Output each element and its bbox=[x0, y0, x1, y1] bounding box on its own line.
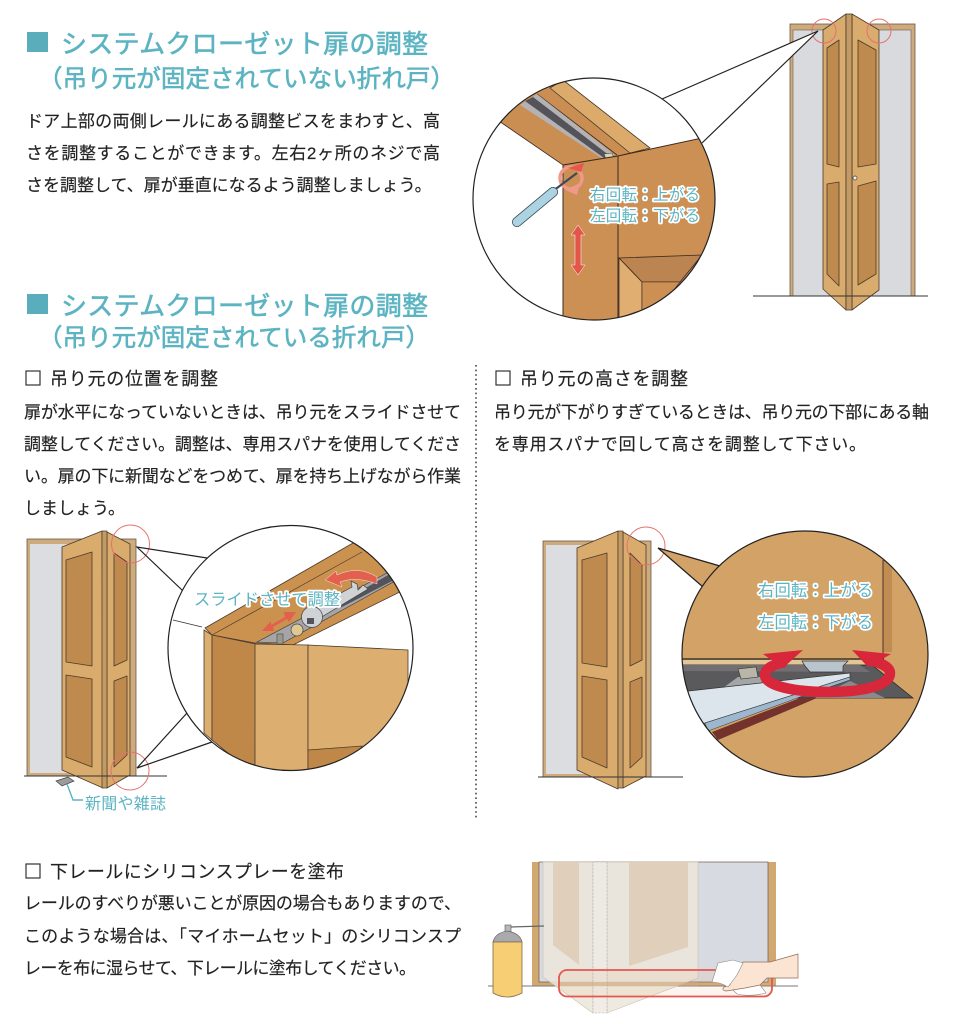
label: rotation direction, right: 左回転：下がる bbox=[758, 614, 873, 632]
illustration: closet frame with faded doors bbox=[488, 862, 798, 1013]
label: rotation direction, top bbox=[590, 186, 700, 225]
heading: section 1 bbox=[27, 29, 455, 93]
plate: spanner blade bbox=[688, 672, 850, 724]
arrow: spanner turning bbox=[325, 570, 377, 587]
text block: adjust hanger height: 吊り元の高さを調整 bbox=[520, 369, 688, 389]
arrow: rotation ring bbox=[763, 650, 891, 692]
dotted divider bbox=[475, 365, 477, 820]
heading: section 1: （吊り元が固定されていない折れ戸） bbox=[38, 65, 455, 93]
label: newspapers or magazines: 新聞や雑誌 bbox=[85, 795, 166, 813]
callout: magnified rail with screwdriver bbox=[473, 31, 818, 330]
heading: section 2 bbox=[27, 291, 430, 352]
heading: section 2: （吊り元が固定されている折れ戸） bbox=[38, 324, 430, 352]
callout: magnified hanger with wrench bbox=[137, 526, 420, 790]
text block: adjust hanger position bbox=[24, 369, 461, 518]
text block: silicone spray bbox=[24, 862, 461, 978]
label: rotation direction, right: 右回転：上がる bbox=[758, 582, 873, 600]
icon: spray can bbox=[493, 925, 544, 997]
heading: section 2: システムクローゼット扉の調整 bbox=[61, 291, 428, 321]
illustration: folding door, top right bbox=[753, 14, 928, 310]
text block: adjust hanger position: しましょう。 bbox=[24, 499, 125, 518]
text block: adjust hanger height: を専用スパナで回して高さを調整して下さい。 bbox=[494, 435, 866, 454]
illustration: folding door, middle right bbox=[538, 527, 683, 789]
heading: section 1: システムクローゼット扉の調整 bbox=[61, 29, 428, 59]
text block: adjust hanger height: 吊り元が下がりすぎているときは、吊り元の下部にある軸 bbox=[494, 403, 929, 422]
text block: adjust hanger position: 扉が水平になっていないときは、吊り元をスライドさせて bbox=[24, 403, 461, 422]
icon: hand wiping with cloth bbox=[712, 954, 798, 995]
text block: section 1 description bbox=[26, 112, 440, 195]
text block: silicone spray: レーを布に湿らせて、下レールに塗布してください。 bbox=[24, 959, 416, 978]
arrow: up and down bbox=[571, 225, 585, 275]
callout: magnified lower pivot bbox=[658, 531, 928, 777]
text block: adjust hanger height bbox=[494, 369, 929, 454]
text block: section 1 description: ドア上部の両側レールにある調整ビスをまわすと、高 bbox=[26, 112, 440, 131]
text block: silicone spray: このような場合は、「マイホームセット」のシリコンスプ bbox=[24, 927, 461, 946]
label: slide to adjust: スライドさせて調整 bbox=[194, 591, 340, 609]
label: rotation direction, top: 左回転：下がる bbox=[590, 207, 700, 225]
icon: newspaper under door bbox=[56, 777, 74, 786]
label: rotation direction, top: 右回転：上がる bbox=[590, 186, 700, 204]
text block: adjust hanger position: 調整してください。調整は、専用スパナを使用してくださ bbox=[24, 434, 461, 454]
text block: adjust hanger position: 吊り元の位置を調整 bbox=[50, 369, 218, 389]
highlight: lower rail bbox=[559, 970, 772, 996]
arrow: slide direction bbox=[262, 612, 296, 631]
text block: silicone spray: 下レールにシリコンスプレーを塗布 bbox=[50, 862, 344, 882]
label: rotation direction, right bbox=[758, 582, 873, 632]
icon: spanner bbox=[277, 581, 368, 644]
text block: silicone spray: レールのすべりが悪いことが原因の場合もありますので、 bbox=[24, 894, 461, 913]
text block: adjust hanger position: い。扉の下に新聞などをつめて、扉を持ち上げながら作業 bbox=[24, 467, 461, 486]
illustration: folding door, middle left bbox=[24, 525, 167, 790]
text block: section 1 description: さを調整することができます。左右2ヶ所のネジで高 bbox=[26, 144, 440, 163]
label: newspapers or magazines bbox=[67, 784, 166, 813]
text block: section 1 description: さを調整して、扉が垂直になるよう調整しましょう。 bbox=[26, 176, 432, 195]
